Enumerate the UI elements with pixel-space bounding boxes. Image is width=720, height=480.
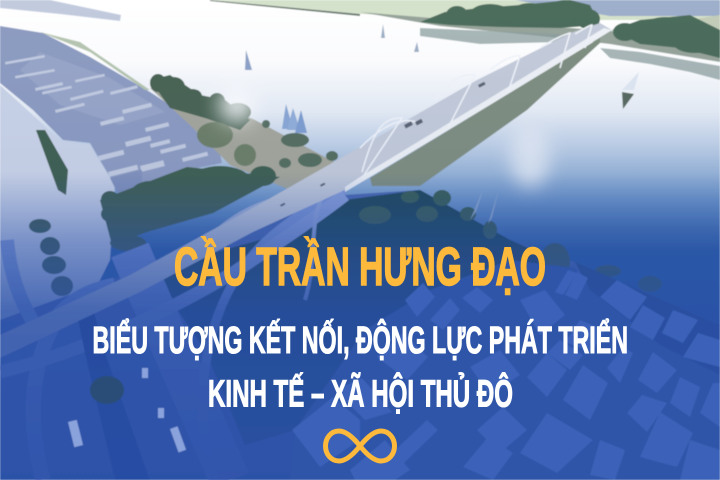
central green parkland [150, 190, 560, 445]
sun glow [219, 87, 255, 123]
foreground tree [90, 376, 124, 404]
left embankment and road [0, 85, 115, 320]
right-bank grass strip [575, 262, 720, 375]
subtitle line 2: KINH TẾ – XÃ HỘI THỦ ĐÔ [208, 370, 513, 416]
foreground road vehicles [68, 368, 186, 452]
river [0, 0, 720, 340]
sunlit hillside with trees [150, 74, 340, 190]
near-bank blue sails [470, 190, 498, 224]
vehicles on bridge [280, 82, 486, 207]
bridge arches [360, 25, 592, 178]
road median [75, 305, 150, 480]
far bank trees [420, 0, 720, 58]
sails [245, 24, 639, 133]
right foreground base [290, 260, 720, 480]
icon: infinity symbol [326, 431, 394, 461]
foreground city blocks [292, 270, 720, 480]
bridge shadow on water [370, 38, 600, 186]
riverside buildings district [0, 26, 222, 198]
near land base [0, 190, 720, 480]
bridge deck and main viaduct [0, 23, 612, 358]
near-side tree mass [29, 130, 280, 296]
tree reflections on water [420, 28, 720, 80]
interchange roads [0, 186, 345, 480]
strip of green along the bank [40, 32, 150, 90]
near bank trees, right of the bridge [359, 190, 662, 292]
far bank, top right [210, 0, 720, 62]
top-left sandbar [0, 0, 121, 21]
cloud reflection [510, 121, 550, 189]
